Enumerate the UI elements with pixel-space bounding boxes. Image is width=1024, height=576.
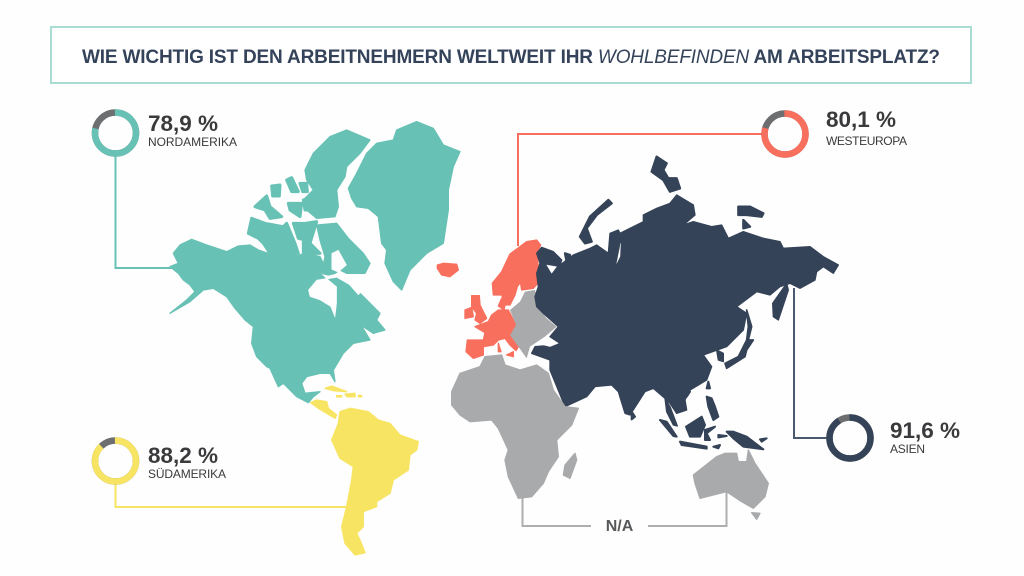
map: Eastern Europe [510,290,557,358]
stat: Nordamerika: NORDAMERIKA [148,135,237,149]
Sakhalin [773,283,788,320]
connector: Westeuropa [518,134,762,246]
Malay peninsula [665,398,677,426]
continental Western Europe [466,310,518,358]
connector: Südamerika [116,484,347,507]
stat: Nordamerika [95,111,237,154]
Tasmania [752,513,760,519]
South America [332,408,418,555]
Iceland [437,263,458,277]
donut: 80.1 percent [764,114,806,154]
Baffin Island [317,223,370,275]
Denmark [498,298,505,310]
donut: 78.9 percent [95,112,136,154]
Black Sea [537,243,621,347]
map: Asia [532,157,838,449]
stat: Nordamerika: 78,9 % [148,111,218,136]
stat: Westeuropa: WESTEUROPA [826,134,907,148]
connector: Nordamerika [116,155,182,268]
stat: Asien [830,418,960,458]
connector: Asien [794,288,828,438]
Japan [725,310,753,368]
Arctic islands [248,178,320,253]
North American mainland [170,239,385,403]
map: South and Central America [311,386,418,555]
Korea [717,350,723,362]
Arctic islands of Russia [565,157,763,262]
title banner: WIE WICHTIG IST DEN ARBEITNEHMERN WELTWEIT IHR WOHLBEFINDEN AM ARBEITSPLATZ? [82,47,940,68]
label: N/A: N/A [606,518,634,535]
map: Western Europe [437,240,541,358]
stat: Südamerika: 88,2 % [148,443,218,468]
stat: Asien: ASIEN [890,442,925,456]
Southeast Asian islands [632,382,767,449]
Ellesmere Island [303,130,370,218]
map: North America and Greenland [170,122,460,403]
Scandinavia [492,240,541,305]
Caribbean islands [325,386,362,397]
Madagascar [563,453,577,478]
Asian mainland [532,195,838,415]
Mediterranean islands [498,343,513,357]
donut: 88.2 percent [95,440,136,482]
title banner [51,27,971,83]
stat: Westeuropa: 80,1 % [826,107,896,132]
map: Africa and Australia [452,355,768,519]
stat: Westeuropa [764,107,907,154]
Greenland [348,122,460,290]
connector: N/A regions [522,492,726,526]
stat: Südamerika [95,440,226,482]
Africa [452,355,578,498]
stat: Asien: 91,6 % [890,418,960,443]
Australia [693,450,768,508]
British Isles [465,296,487,323]
stat: Südamerika: SÜDAMERIKA [148,467,226,481]
Hudson Bay [308,250,362,317]
donut: 91.6 percent [830,418,870,458]
Central America [311,400,337,418]
